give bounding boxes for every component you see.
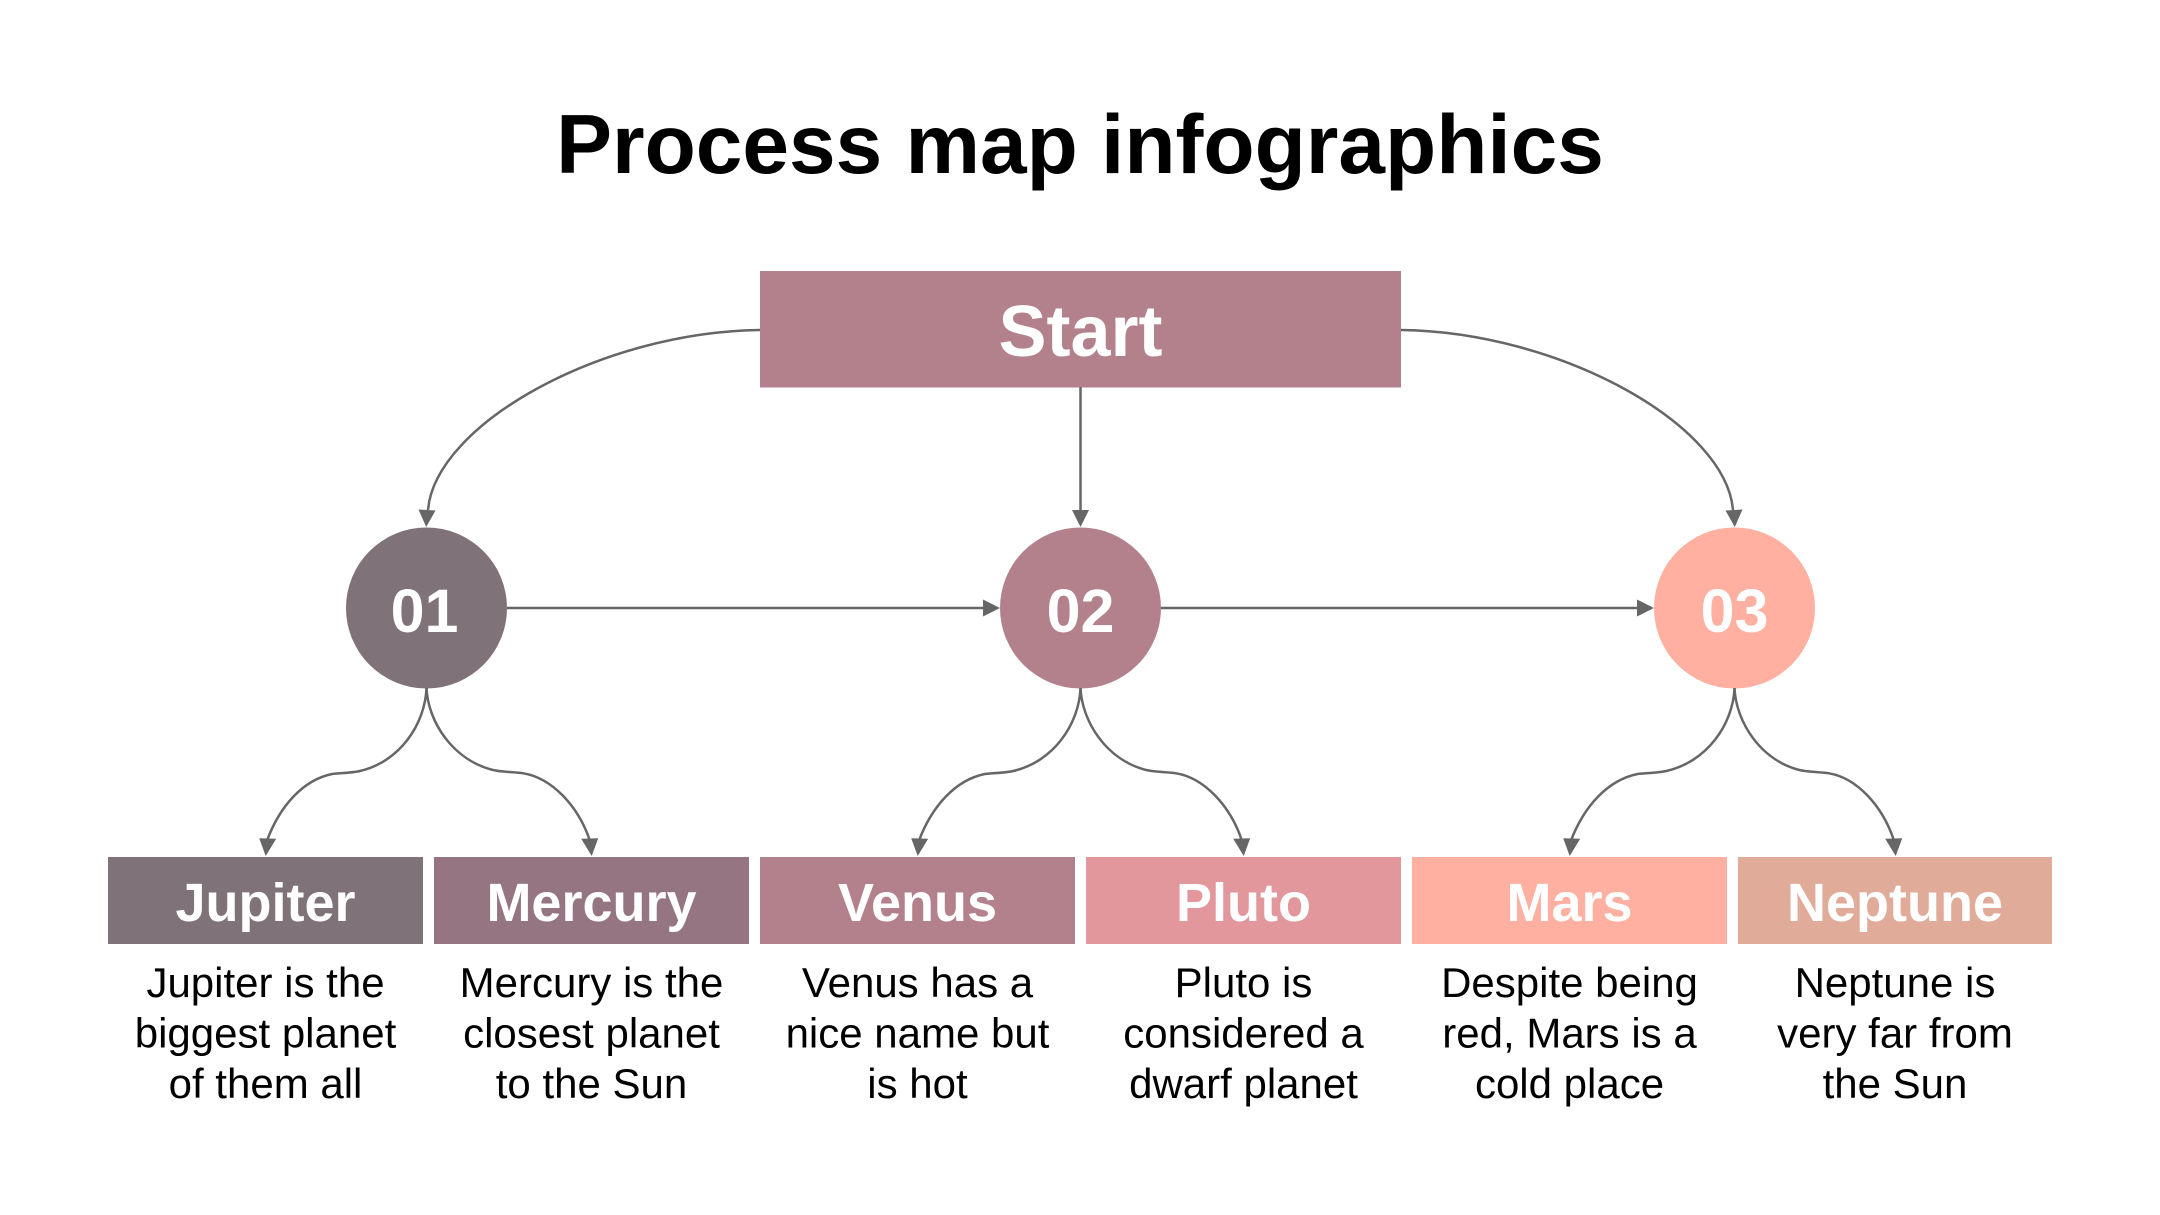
arrow: 01 to 02 (507, 600, 1000, 616)
circle 01: 01 (391, 577, 458, 645)
card: Mercury: Mercury (486, 873, 697, 933)
circle 01 (346, 528, 507, 688)
card: Pluto: considered a (1123, 1010, 1364, 1056)
card: Neptune: very far from (1777, 1010, 2013, 1056)
branch arrows from 02 (911, 688, 1250, 856)
card: Mercury: to the Sun (496, 1060, 687, 1107)
card: Jupiter: Jupiter (175, 873, 356, 933)
card: Pluto: Pluto is (1175, 959, 1312, 1006)
card: Pluto: Pluto (1176, 873, 1311, 933)
card: Venus: Venus has a (802, 959, 1034, 1006)
card: Mars: cold place (1475, 1060, 1664, 1107)
circle 02: 02 (1047, 577, 1114, 645)
card: Venus: nice name but (786, 1010, 1050, 1056)
card: Pluto: dwarf planet (1129, 1060, 1358, 1107)
card: Venus: is hot (867, 1060, 968, 1107)
card: Mars (1412, 857, 1727, 1107)
arrow: 02 to 03 (1161, 600, 1654, 616)
card: Venus: Venus (838, 873, 997, 933)
card: Mars: Despite being (1441, 959, 1698, 1006)
arrow: start to 01 (418, 330, 760, 527)
card: Neptune: Neptune is (1795, 959, 1995, 1006)
arrow: start to 03 (1401, 330, 1742, 527)
card: Jupiter (108, 857, 423, 1107)
card: Jupiter: of them all (169, 1060, 362, 1107)
card: Pluto (1086, 857, 1401, 1107)
branch arrows from 01 (259, 688, 598, 856)
card: Jupiter: biggest planet (135, 1010, 397, 1056)
card: Mercury: Mercury is the (460, 959, 723, 1006)
circle 03: 03 (1701, 577, 1768, 645)
arrow: start to 02 (1072, 387, 1089, 527)
start box: Start (998, 292, 1163, 372)
card: Neptune (1738, 857, 2052, 1107)
card: Neptune: Neptune (1787, 873, 2003, 933)
circle 03 (1654, 528, 1815, 688)
title: Process map infographics (556, 97, 1604, 191)
card: Venus (760, 857, 1075, 1107)
card: Mars: Mars (1506, 873, 1633, 933)
card: Jupiter: Jupiter is the (146, 959, 385, 1006)
circle 02 (1000, 528, 1161, 688)
branch arrows from 03 (1563, 688, 1902, 856)
card: Neptune: the Sun (1823, 1060, 1967, 1107)
card: Mercury: closest planet (463, 1010, 720, 1056)
card: Mars: red, Mars is a (1442, 1010, 1697, 1056)
card: Mercury (434, 857, 749, 1107)
start box (760, 271, 1401, 388)
